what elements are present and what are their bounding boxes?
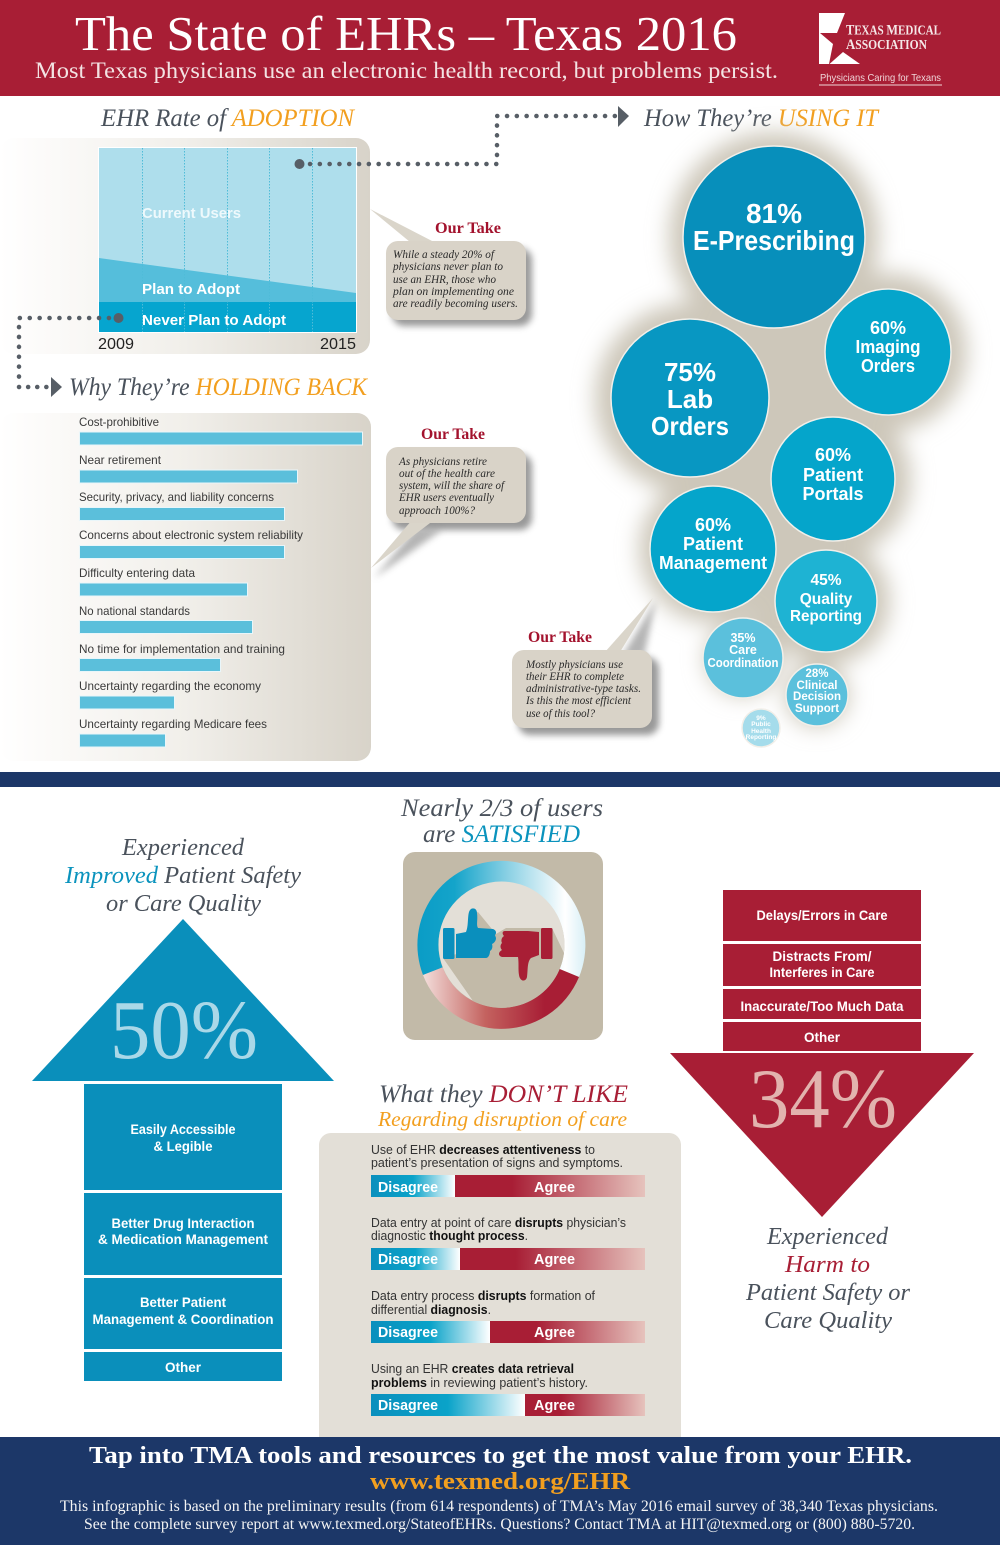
statement: thought process [371, 1216, 645, 1270]
heading: nearly 2/3 satisfied: are SATISFIED [423, 821, 580, 848]
down arrow: 34% harm: Delays/Errors in Care [756, 907, 888, 923]
heading: experienced improved patient safety: Improved Patient Safety [64, 863, 301, 889]
footer band: Tap into TMA tools and resources to get the most value from your EHR. [89, 1442, 912, 1469]
bubble chart: how they use EHRs: Reporting [746, 734, 776, 741]
statement: thought process: Disagree [378, 1251, 438, 1268]
bubble chart: how they use EHRs: 60% [870, 318, 906, 338]
bubble chart: how they use EHRs: Patient [683, 534, 743, 554]
callout: our take tasks [512, 598, 659, 735]
title: The State of EHRs – Texas 2016 [75, 6, 737, 61]
callout: our take retirement: approach 100%? [399, 505, 475, 517]
callout: our take retirement: out of the health care [399, 468, 495, 480]
callout: our take adoption: use an EHR, those who [393, 274, 496, 286]
subtitle: Most Texas physicians use an electronic health record, but problems persist. [35, 58, 778, 83]
statement: differential diagnosis: Data entry process disrupts formation of [371, 1289, 596, 1303]
bubble chart: how they use EHRs: Orders [861, 356, 915, 376]
heading: experienced harm [745, 1224, 911, 1334]
bubble chart: how they use EHRs: Portals [802, 484, 864, 504]
callout: our take adoption: Our Take [435, 220, 501, 237]
down arrow: 34% harm: Inaccurate/Too Much Data [740, 998, 904, 1014]
up arrow: 50% improved: & Medication Management [98, 1231, 268, 1247]
callout: our take adoption: plan on implementing one [392, 286, 514, 298]
up arrow: 50% improved: Easily Accessible [130, 1121, 236, 1137]
bubble chart: how they use EHRs: Management [659, 553, 767, 573]
heading: what they don't like: Regarding disruption of care [377, 1107, 627, 1131]
panel: holding back bar chart: Security, privacy, and liability concerns [79, 490, 274, 504]
callout: our take retirement: system, will the share of [399, 480, 506, 492]
heading: experienced harm: Care Quality [764, 1308, 892, 1334]
bubble chart: how they use EHRs: Decision [793, 691, 841, 703]
heading: EHR rate of adoption: EHR Rate of ADOPTION [100, 105, 355, 132]
statement: data retrieval [371, 1362, 645, 1416]
panel: holding back bar chart: No time for implementation and training [79, 642, 285, 656]
statement: thought process: Data entry at point of care disrupts physician’s [371, 1216, 626, 1230]
bubble chart: how they use EHRs: E-Prescribing [693, 225, 855, 256]
callout: our take adoption: physicians never plan to [392, 261, 503, 273]
panel: adoption chart: 2009 [98, 336, 134, 353]
callout: our take retirement: EHR users eventually [398, 492, 495, 504]
callout: our take retirement: Our Take [421, 426, 485, 443]
heading: experienced harm: Experienced [766, 1224, 889, 1250]
heading: what they don't like: What they DON’T LIKE [379, 1081, 628, 1108]
heading: experienced improved patient safety: or Care Quality [106, 891, 261, 917]
icon: thumbs down [499, 928, 552, 981]
up arrow: 50% improved [32, 919, 334, 1381]
footer band: www.texmed.org/EHR [370, 1468, 630, 1495]
panel: disruption of care [319, 1133, 681, 1453]
panel: thumbs icon [403, 852, 603, 1040]
statement: differential diagnosis: Agree [534, 1324, 575, 1341]
bubble chart: how they use EHRs: 60% [815, 445, 851, 465]
statement: data retrieval: Disagree [378, 1397, 438, 1414]
panel: holding back bar chart: Uncertainty regarding the economy [79, 679, 261, 693]
area chart: Never Plan to Adopt [142, 312, 286, 329]
navy divider band [0, 772, 1000, 787]
statement: data retrieval: problems in reviewing patient’s history. [371, 1376, 588, 1390]
heading: how they're using it: How They’re USING IT [643, 105, 880, 132]
heading: why they're holding back: Why They’re HOLDING BACK [69, 374, 368, 401]
heading: experienced harm: Harm to [784, 1252, 870, 1278]
bubble chart: how they use EHRs: 75% [664, 357, 716, 387]
callout: our take adoption [370, 209, 532, 326]
panel: holding back bar chart: Near retirement [79, 453, 162, 467]
down arrow: 34% harm: Interferes in Care [770, 964, 875, 980]
heading: experienced harm: Patient Safety or [745, 1280, 911, 1306]
bubble chart: how they use EHRs: 60% [695, 515, 731, 535]
bubble chart: how they use EHRs: Orders [651, 411, 729, 441]
heading: nearly 2/3 satisfied: Nearly 2/3 of users [400, 795, 603, 822]
down arrow: 34% harm: Distracts From/ [772, 948, 872, 964]
heading: what they don't like [377, 1081, 628, 1131]
heading: experienced improved patient safety: Experienced [121, 835, 245, 861]
panel: holding back bar chart: Difficulty entering data [79, 566, 195, 580]
up arrow: 50% improved: Management & Coordination [92, 1311, 274, 1327]
bubble chart: how they use EHRs: Lab [667, 384, 713, 414]
callout: our take adoption: While a steady 20% of [393, 249, 496, 261]
heading: nearly 2/3 satisfied [400, 795, 603, 848]
up arrow: 50% improved: 50% [110, 984, 258, 1077]
area chart [98, 147, 357, 333]
callout: our take tasks: use of this tool? [526, 708, 595, 720]
header banner [0, 0, 1000, 96]
footer band [0, 1437, 1000, 1545]
area chart: Plan to Adopt [142, 281, 240, 298]
down arrow: 34% harm: Other [804, 1029, 841, 1045]
callout: our take adoption: are readily becoming users. [393, 298, 518, 310]
bubble chart: how they use EHRs: Health [751, 728, 771, 735]
panel: holding back bar chart: Uncertainty regarding Medicare fees [79, 717, 267, 731]
callout: our take retirement [371, 426, 532, 578]
callout: our take tasks: their EHR to complete [526, 671, 624, 683]
bubble chart: how they use EHRs: Coordination [708, 656, 778, 670]
panel: adoption chart: 2015 [320, 336, 356, 353]
up arrow: 50% improved: Better Patient [140, 1294, 226, 1310]
icon: thumbs up [443, 908, 496, 959]
statement: attentiveness: patient’s presentation of signs and symptoms. [371, 1156, 623, 1170]
logo: Texas Medical Association: TEXAS MEDICAL [846, 22, 941, 38]
bubble chart: how they use EHRs: 35% [730, 631, 756, 645]
bubble chart: how they use EHRs: Quality [800, 591, 853, 608]
callout: our take retirement: As physicians retire [398, 456, 487, 468]
dotted connector to Why They're Holding Back [19, 313, 124, 397]
panel: adoption chart [0, 138, 370, 354]
panel: holding back bar chart: Concerns about electronic system reliability [79, 528, 303, 542]
logo: Texas Medical Association [819, 13, 942, 85]
statement: attentiveness: Use of EHR decreases attentiveness to [371, 1143, 595, 1157]
panel: holding back bar chart: No national standards [79, 604, 190, 618]
bubble chart: how they use EHRs [595, 132, 967, 747]
bubble chart: how they use EHRs: Imaging [856, 337, 920, 357]
footer band: See the complete survey report at www.texmed.org/StateofEHRs. Questions? Contact TMA at HIT@texmed.org or (800) 880-5720. [84, 1516, 915, 1533]
panel: holding back bar chart [0, 413, 371, 761]
callout: our take tasks: administrative-type tasks. [526, 683, 641, 695]
statement: attentiveness: Disagree [378, 1179, 438, 1196]
logo: Texas Medical Association: ASSOCIATION [846, 37, 927, 53]
logo: Texas Medical Association: Physicians Caring for Texans [820, 72, 941, 84]
up arrow: 50% improved: & Legible [154, 1138, 213, 1154]
dotted connector to How They're Using It [294, 106, 629, 169]
callout: our take tasks: Is this the most efficient [525, 695, 632, 707]
statement: thought process: diagnostic thought process. [371, 1229, 528, 1243]
callout: our take tasks: Our Take [528, 629, 592, 646]
bubble chart: how they use EHRs: 81% [746, 198, 802, 229]
statement: thought process: Agree [534, 1251, 575, 1268]
bubble chart: how they use EHRs: 28% [805, 668, 829, 680]
area chart: Current Users [142, 205, 241, 222]
statement: data retrieval: Using an EHR creates data retrieval [371, 1362, 574, 1376]
statement: data retrieval: Agree [534, 1397, 575, 1414]
down arrow: 34% harm: 34% [749, 1052, 897, 1146]
statement: attentiveness: Agree [534, 1179, 575, 1196]
statement: differential diagnosis: differential diagnosis. [371, 1303, 491, 1317]
bubble chart: how they use EHRs: Clinical [797, 680, 837, 692]
bubble chart: how they use EHRs: Patient [803, 465, 863, 485]
up arrow: 50% improved: Better Drug Interaction [112, 1215, 254, 1231]
bubble chart: how they use EHRs: Support [795, 703, 839, 715]
bubble chart: how they use EHRs: Reporting [790, 608, 862, 625]
bubble chart: how they use EHRs: 9% [756, 715, 766, 722]
callout: our take tasks: Mostly physicians use [525, 659, 623, 671]
statement: differential diagnosis [371, 1289, 645, 1343]
statement: attentiveness [371, 1143, 645, 1197]
footer band: This infographic is based on the preliminary results (from 614 respondents) of TMA’s May 2016 email survey of 38,340 Texas physicians. [60, 1498, 938, 1515]
bubble chart: how they use EHRs: Public [751, 721, 771, 728]
panel: holding back bar chart: Cost-prohibitive [79, 415, 159, 429]
down arrow: 34% harm [670, 890, 974, 1217]
statement: differential diagnosis: Disagree [378, 1324, 438, 1341]
bubble chart: how they use EHRs: Care [729, 643, 757, 657]
heading: experienced improved patient safety [64, 835, 301, 917]
up arrow: 50% improved: Other [165, 1359, 202, 1375]
satisfaction ring [417, 861, 585, 1029]
bubble chart: how they use EHRs: 45% [810, 572, 842, 589]
